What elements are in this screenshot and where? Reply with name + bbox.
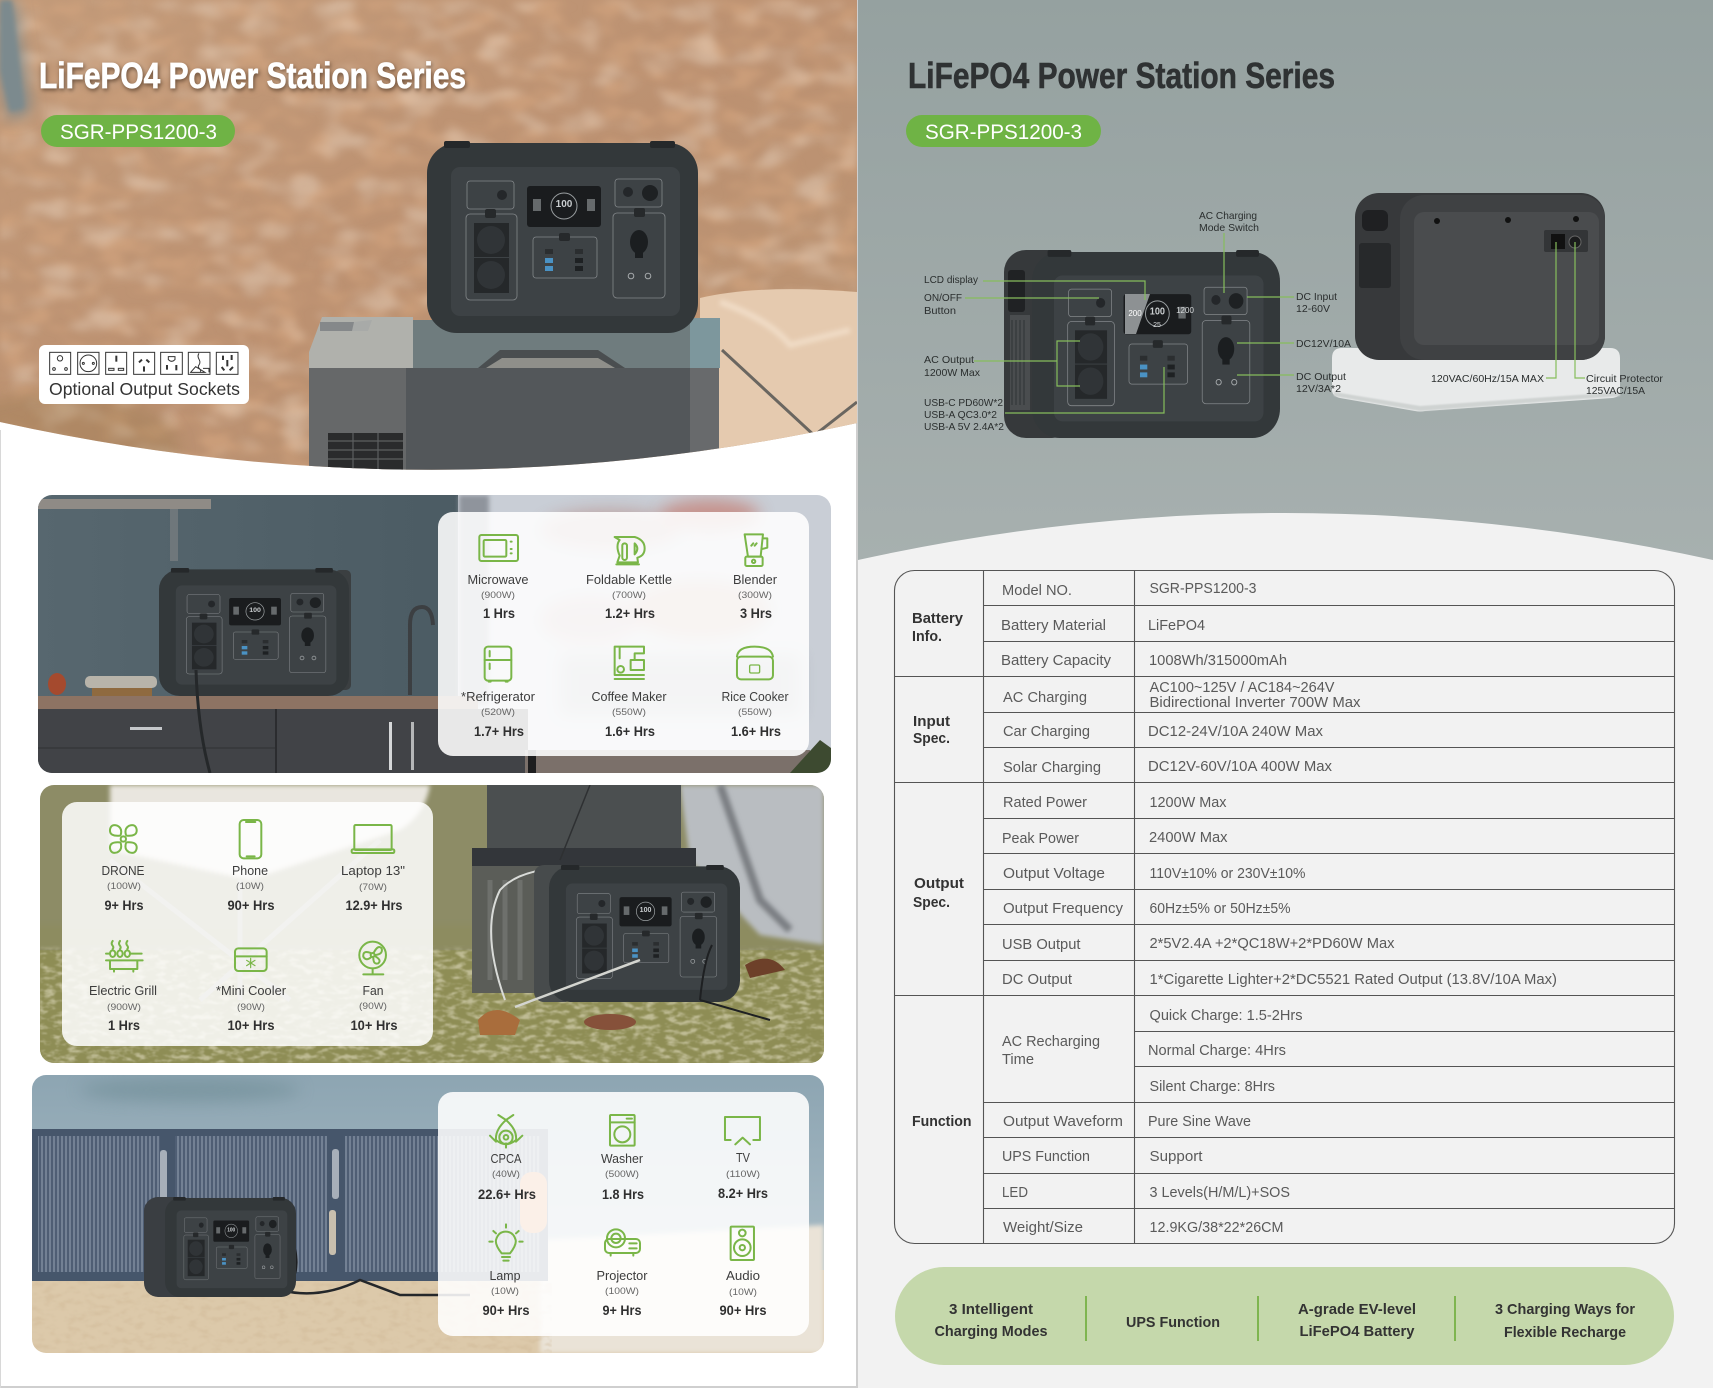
table group: function: Weight/Size — [1003, 1220, 1083, 1236]
badge: left model number — [41, 115, 235, 147]
table group: battery info: Battery Capacity — [1001, 653, 1112, 669]
table group: input spec — [913, 680, 1361, 776]
panel: kitchen appliance runtimes: (550W) — [738, 707, 772, 718]
table group: output spec: 2400W Max — [1149, 830, 1228, 846]
panel: beach appliance runtimes: 90+ Hrs — [482, 1303, 530, 1318]
callout: DC input label — [1296, 291, 1337, 315]
panel: outdoor appliance runtimes: (900W) — [107, 1002, 141, 1013]
table group: input spec: Spec. — [913, 730, 950, 747]
panel: kitchen appliance runtimes: Rice Cooker — [722, 689, 789, 704]
panel: kitchen appliance runtimes: Microwave — [468, 572, 528, 587]
table group: function: Support — [1150, 1149, 1202, 1165]
feature: battery: A-grade EV-level — [1298, 1301, 1416, 1318]
panel: kitchen appliance runtimes: 1.6+ Hrs — [605, 724, 655, 739]
panel: outdoor appliance runtimes: (10W) — [236, 881, 264, 892]
callout: AC charging mode switch label: Mode Switch — [1199, 222, 1259, 234]
panel: outdoor appliance runtimes: Phone — [232, 863, 268, 878]
panel: outdoor appliance runtimes: (100W) — [107, 881, 141, 892]
table group: function: 12.9KG/38*22*26CM — [1150, 1220, 1284, 1236]
panel: outdoor appliance runtimes: *Mini Cooler — [216, 983, 287, 998]
callout: on off button label — [924, 292, 962, 317]
panel: optional output sockets — [39, 345, 249, 404]
badge: right model number — [906, 115, 1101, 147]
callout: DC output label: 12V/3A*2 — [1296, 383, 1341, 395]
feature: charging modes: Charging Modes — [934, 1323, 1048, 1340]
panel: right hero background — [858, 0, 1713, 560]
table group: function: Pure Sine Wave — [1148, 1114, 1251, 1130]
table group: input spec: Car Charging — [1003, 724, 1090, 740]
panel: beach appliance runtimes — [438, 1092, 809, 1336]
panel: outdoor appliance runtimes: DRONE — [102, 863, 145, 878]
table group: function: Function — [912, 1113, 972, 1130]
feature: battery: LiFePO4 Battery — [1300, 1323, 1415, 1340]
panel: left hero autumn photo — [0, 0, 857, 510]
table group: output spec: 1200W Max — [1150, 795, 1227, 811]
panel: beach appliance runtimes: CPCA — [490, 1151, 522, 1166]
panel: outdoor appliance runtimes: (90W) — [237, 1002, 265, 1013]
panel: kitchen appliance runtimes: 1.7+ Hrs — [474, 724, 524, 739]
panel: kitchen appliance runtimes: 3 Hrs — [740, 606, 772, 621]
panel: kitchen card — [38, 495, 831, 773]
panel: kitchen appliance runtimes: 1.6+ Hrs — [731, 724, 781, 739]
panel: beach appliance runtimes: (110W) — [726, 1169, 760, 1180]
table group: input spec: Bidirectional Inverter 700W Max — [1150, 695, 1361, 711]
table group: output spec — [913, 795, 1557, 988]
title: left: LiFePO4 Power Station Series — [39, 55, 466, 96]
panel: outdoor appliance runtimes: (90W) — [359, 1001, 387, 1012]
panel: outdoor appliance runtimes: Laptop 13" — [341, 863, 405, 878]
callout: front and rear leader lines — [965, 233, 1585, 413]
callout: USB label: USB-A QC3.0*2 — [924, 409, 997, 421]
badge: left model number: SGR-PPS1200-3 — [60, 121, 217, 144]
table group: battery info: Battery — [912, 610, 964, 627]
photo: front view power station: 1200 — [1176, 306, 1194, 315]
callout: on off button label: ON/OFF — [924, 292, 962, 304]
feature: UPS function: UPS Function — [1126, 1314, 1220, 1331]
photo: kitchen — [38, 495, 831, 773]
feature: charging ways — [1495, 1301, 1635, 1341]
callout: DC input label: 12-60V — [1296, 303, 1330, 315]
table group: output spec: DC Output — [1002, 972, 1072, 988]
callout: USB label: USB-C PD60W*2 — [924, 397, 1003, 409]
table group: battery info: Battery Material — [1001, 618, 1106, 634]
callout: on off button label: Button — [924, 305, 956, 317]
panel: beach appliance runtimes: (10W) — [491, 1286, 519, 1297]
table group: output spec: Output Voltage — [1003, 866, 1105, 882]
panel: outdoor grass card — [30, 785, 834, 1063]
table group: function: LED — [1002, 1185, 1028, 1201]
panel: kitchen appliance runtimes: (900W) — [481, 590, 515, 601]
photo: power station on cooler — [427, 141, 698, 333]
panel: beach appliance runtimes: (500W) — [605, 1169, 639, 1180]
table group: input spec: DC12V-60V/10A 400W Max — [1148, 759, 1333, 775]
table group: function: Output Waveform — [1003, 1114, 1123, 1130]
icons: outdoor row 1 and 2 — [106, 820, 394, 974]
table group: function — [912, 1008, 1302, 1236]
panel: kitchen appliance runtimes: 1 Hrs — [483, 606, 515, 621]
panel: outdoor appliance runtimes: 90+ Hrs — [228, 898, 274, 913]
panel: outdoor appliance runtimes — [62, 802, 433, 1046]
feature: charging ways: Flexible Recharge — [1504, 1324, 1626, 1341]
callout: USB label — [924, 397, 1004, 433]
photo: front view power station: 200 — [1128, 309, 1142, 318]
panel: beach appliance runtimes: Projector — [596, 1268, 648, 1283]
table group: output spec: Rated Power — [1003, 795, 1087, 811]
callout: DC output label: DC Output — [1296, 371, 1346, 383]
table group: input spec: AC100~125V / AC184~264V — [1150, 680, 1335, 696]
panel: beach appliance runtimes: 22.6+ Hrs — [478, 1187, 536, 1202]
panel: right page background — [858, 0, 1713, 1388]
callout: circuit protector label — [1586, 373, 1664, 397]
photo: front view power station: 25 — [1153, 322, 1161, 329]
table group: output spec: 1*Cigarette Lighter+2*DC5521 Rated Output (13.8V/10A Max) — [1150, 972, 1557, 988]
badge: right model number: SGR-PPS1200-3 — [925, 121, 1082, 144]
callout: AC output label: 1200W Max — [924, 367, 981, 379]
panel: outdoor appliance runtimes: 9+ Hrs — [104, 898, 144, 913]
callout: AC output label — [924, 354, 981, 379]
panel: kitchen appliance runtimes: Foldable Kettle — [586, 572, 672, 587]
table group: input spec: DC12-24V/10A 240W Max — [1148, 724, 1324, 740]
panel: beach appliance runtimes: (100W) — [605, 1286, 639, 1297]
table group: output spec: Peak Power — [1002, 831, 1079, 847]
table group: function: Quick Charge: 1.5-2Hrs — [1150, 1008, 1302, 1024]
panel: beach appliance runtimes: 8.2+ Hrs — [718, 1186, 768, 1201]
panel: beach appliance runtimes: (10W) — [729, 1287, 757, 1298]
panel: beach appliance runtimes: 90+ Hrs — [720, 1303, 766, 1318]
table group: battery info — [912, 581, 1287, 669]
table group: function: Normal Charge: 4Hrs — [1148, 1043, 1286, 1059]
table group: function: UPS Function — [1002, 1149, 1090, 1165]
photo: beach with solar panel — [32, 1075, 824, 1353]
panel: feature band — [895, 1267, 1674, 1365]
table group: output spec: Spec. — [913, 894, 950, 911]
icons: kitchen row 1 and 2 — [479, 534, 773, 682]
table group: output spec: 60Hz±5% or 50Hz±5% — [1150, 901, 1291, 917]
table group: battery info: LiFePO4 — [1148, 618, 1205, 634]
table group: input spec: AC Charging — [1003, 690, 1087, 706]
panel: outdoor appliance runtimes: Electric Grill — [89, 983, 157, 998]
panel: beach appliance runtimes: (40W) — [492, 1169, 520, 1180]
callout: circuit protector label: Circuit Protector — [1586, 373, 1664, 385]
feature: charging modes — [934, 1301, 1048, 1340]
panel: kitchen appliance runtimes — [438, 512, 809, 756]
panel: beach appliance runtimes: Audio — [726, 1268, 760, 1283]
table group: input spec: Input — [913, 713, 950, 730]
table group: output spec: Output — [914, 875, 964, 892]
callout: DC input label: DC Input — [1296, 291, 1337, 303]
panel: beach solar card — [32, 1075, 824, 1353]
panel: kitchen appliance runtimes: (520W) — [481, 707, 515, 718]
panel: kitchen appliance runtimes: (700W) — [612, 590, 646, 601]
panel: left page background — [0, 0, 857, 1388]
table group: output spec: USB Output — [1002, 937, 1080, 953]
panel: beach appliance runtimes: 1.8 Hrs — [602, 1187, 644, 1202]
callout: 120VAC label: 120VAC/60Hz/15A MAX — [1431, 373, 1544, 385]
panel: beach appliance runtimes: Lamp — [490, 1268, 520, 1283]
callout: AC charging mode switch label — [1199, 210, 1259, 234]
panel: outdoor appliance runtimes: 1 Hrs — [108, 1018, 140, 1033]
panel: beach appliance runtimes: Washer — [601, 1151, 644, 1166]
table group: function: Silent Charge: 8Hrs — [1150, 1079, 1275, 1095]
panel: outdoor appliance runtimes: 12.9+ Hrs — [346, 898, 402, 913]
table group: function: AC Recharging — [1002, 1034, 1100, 1050]
panel: outdoor appliance runtimes: (70W) — [359, 882, 387, 893]
table group: function: Time — [1002, 1052, 1034, 1068]
panel: kitchen appliance runtimes: Blender — [733, 572, 778, 587]
table group: battery info: SGR-PPS1200-3 — [1150, 581, 1256, 597]
table group: battery info: Model NO. — [1002, 583, 1072, 599]
title: right: LiFePO4 Power Station Series — [908, 55, 1335, 96]
photo: front view power station — [1004, 250, 1280, 438]
callout: DC output label — [1296, 371, 1346, 395]
photo: rear view power station on white base — [1332, 193, 1620, 412]
table group: input spec: Solar Charging — [1003, 760, 1101, 776]
feature: charging modes: 3 Intelligent — [949, 1301, 1033, 1318]
table group: battery info: Info. — [912, 628, 942, 645]
callout: AC charging mode switch label: AC Charging — [1199, 210, 1257, 222]
callout: DC12V label: DC12V/10A — [1296, 338, 1351, 350]
panel: beach appliance runtimes: 9+ Hrs — [602, 1303, 642, 1318]
table group: output spec: 110V±10% or 230V±10% — [1150, 866, 1306, 882]
table group: function: 3 Levels(H/M/L)+SOS — [1150, 1185, 1290, 1201]
panel: optional output sockets: Optional Output Sockets — [49, 379, 240, 399]
callout: circuit protector label: 125VAC/15A — [1586, 385, 1645, 397]
table group: battery info: 1008Wh/315000mAh — [1149, 653, 1287, 669]
table group: output spec: Output Frequency — [1003, 901, 1124, 917]
panel: outdoor appliance runtimes: Fan — [362, 983, 384, 998]
callout: USB label: USB-A 5V 2.4A*2 — [924, 421, 1004, 433]
panel: outdoor appliance runtimes: 10+ Hrs — [350, 1018, 398, 1033]
callout: AC output label: AC Output — [924, 354, 974, 366]
panel: kitchen appliance runtimes: 1.2+ Hrs — [605, 606, 655, 621]
callout: LCD display label: LCD display — [924, 274, 979, 286]
panel: kitchen appliance runtimes: Coffee Maker — [592, 689, 667, 704]
feature: charging ways: 3 Charging Ways for — [1495, 1301, 1635, 1318]
table group: output spec: 2*5V2.4A +2*QC18W+2*PD60W Max — [1150, 936, 1395, 952]
table: specifications — [894, 570, 1674, 1244]
panel: beach appliance runtimes: TV — [736, 1150, 750, 1165]
panel: kitchen appliance runtimes: (300W) — [738, 590, 772, 601]
panel: kitchen appliance runtimes: (550W) — [612, 707, 646, 718]
panel: kitchen appliance runtimes: *Refrigerator — [461, 689, 536, 704]
panel: outdoor appliance runtimes: 10+ Hrs — [228, 1018, 274, 1033]
icons: beach row 1 and 2 — [489, 1115, 760, 1261]
icon: socket row — [50, 352, 238, 374]
feature: battery — [1298, 1301, 1416, 1340]
photo: grass camp — [30, 785, 834, 1063]
